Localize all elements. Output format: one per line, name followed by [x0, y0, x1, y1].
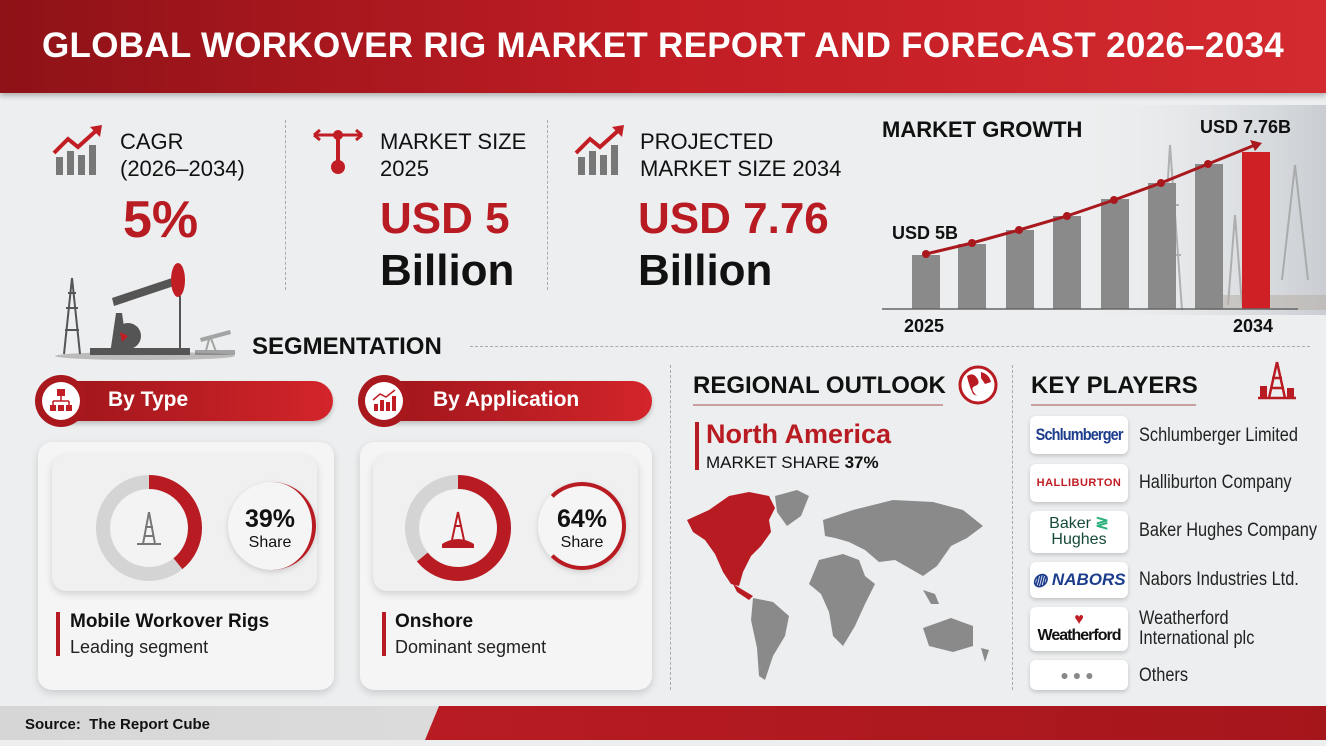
player: Weatherford: ♥ — [1074, 611, 1084, 628]
icon: globe — [958, 366, 998, 404]
chart: market growth: 2025 — [904, 316, 944, 336]
list: key players: Nabors Industries Ltd. — [1139, 569, 1299, 590]
footer: Source: The Report Cube — [25, 716, 210, 733]
chart: market growth: 2034 — [1233, 316, 1273, 336]
player: Baker Hughes — [1030, 511, 1128, 553]
icon: growth chart — [52, 125, 102, 175]
pill: By Application — [358, 375, 654, 427]
pill: By Type — [35, 375, 335, 427]
chart: market growth: MARKET GROWTH — [882, 117, 1082, 142]
list: key players: Halliburton Company — [1139, 472, 1292, 493]
stat: market size 2025: MARKET SIZE — [380, 129, 526, 154]
callout: north america: MARKET SHARE 37% — [706, 453, 879, 472]
stat: CAGR: CAGR — [120, 129, 184, 154]
share: 64%: 64% — [557, 505, 607, 533]
heading: key players: KEY PLAYERS — [1031, 372, 1198, 399]
card: by type: Leading segment — [70, 637, 208, 657]
player: Baker Hughes: Hughes — [1051, 531, 1107, 548]
title bar — [0, 0, 1326, 93]
share: 64%: Share — [561, 534, 603, 551]
list: key players: Schlumberger Limited — [1139, 425, 1298, 446]
share: 39%: Share — [249, 534, 291, 551]
list: key players — [1028, 416, 1317, 694]
card: by type — [38, 442, 334, 690]
player: Nabors: ◍ NABORS — [1032, 570, 1126, 589]
player: Schlumberger — [1030, 416, 1128, 454]
player: Halliburton — [1030, 464, 1128, 502]
player: Others — [1030, 660, 1128, 690]
player: Halliburton: HALLIBURTON — [1037, 477, 1121, 489]
donut: application — [405, 475, 511, 581]
heading: regional outlook: REGIONAL OUTLOOK — [693, 372, 946, 399]
pill: By Type: By Type — [108, 388, 188, 411]
stat: projected 2034: USD 7.76 — [638, 194, 829, 243]
chart: market growth: USD 7.76B — [1200, 117, 1291, 137]
chart: market growth: USD 5B — [892, 223, 958, 243]
heading: segmentation: SEGMENTATION — [252, 333, 442, 360]
stat: market size 2025: 2025 — [380, 156, 429, 181]
share: 39% — [228, 482, 316, 570]
donut: type — [96, 475, 202, 581]
callout: north america: North America — [706, 419, 891, 449]
stat: projected 2034: Billion — [638, 246, 772, 295]
player: Nabors — [1030, 562, 1128, 598]
player: Weatherford: Weatherford — [1038, 627, 1120, 644]
pill: By Application: By Application — [433, 388, 579, 411]
stat: market size 2025: USD 5 — [380, 194, 510, 243]
stat: market size 2025: Billion — [380, 246, 514, 295]
player: Baker Hughes: Baker ≷ — [1049, 515, 1109, 532]
player: Others: ●●● — [1060, 667, 1098, 683]
share: 64% — [538, 482, 626, 570]
stat: market size 2025 — [313, 128, 526, 295]
icon: hierarchy — [42, 382, 80, 420]
card: by application: Onshore — [395, 611, 473, 632]
icon: growth chart — [574, 125, 624, 175]
player: Weatherford — [1030, 607, 1128, 651]
stat: projected 2034 — [574, 125, 841, 295]
icon: pin arrows — [313, 128, 363, 174]
illustration: pump jack — [55, 263, 235, 360]
stat: CAGR: 5% — [123, 191, 198, 249]
player: Schlumberger: Schlumberger — [1036, 425, 1122, 444]
stat: projected 2034: PROJECTED — [640, 129, 773, 154]
stat: CAGR — [52, 125, 245, 249]
callout: north america — [695, 419, 892, 472]
list: key players: International plc — [1139, 628, 1254, 649]
card: by application — [360, 442, 652, 690]
card: by application: Dominant segment — [395, 637, 546, 657]
list: key players: Others — [1139, 665, 1188, 686]
icon: oil rig — [1258, 362, 1296, 400]
world map — [687, 490, 989, 680]
stat: projected 2034: MARKET SIZE 2034 — [640, 156, 841, 181]
footer — [0, 706, 1326, 740]
title bar: GLOBAL WORKOVER RIG MARKET REPORT AND FORECAST 2026–2034 — [42, 26, 1284, 65]
share: 39%: 39% — [245, 505, 295, 533]
card: by type: Mobile Workover Rigs — [70, 611, 269, 632]
stat: CAGR: (2026–2034) — [120, 156, 245, 181]
list: key players: Baker Hughes Company — [1139, 520, 1317, 541]
chart: market growth — [882, 105, 1326, 336]
list: key players: Weatherford — [1139, 608, 1229, 629]
icon: bar chart — [365, 382, 403, 420]
